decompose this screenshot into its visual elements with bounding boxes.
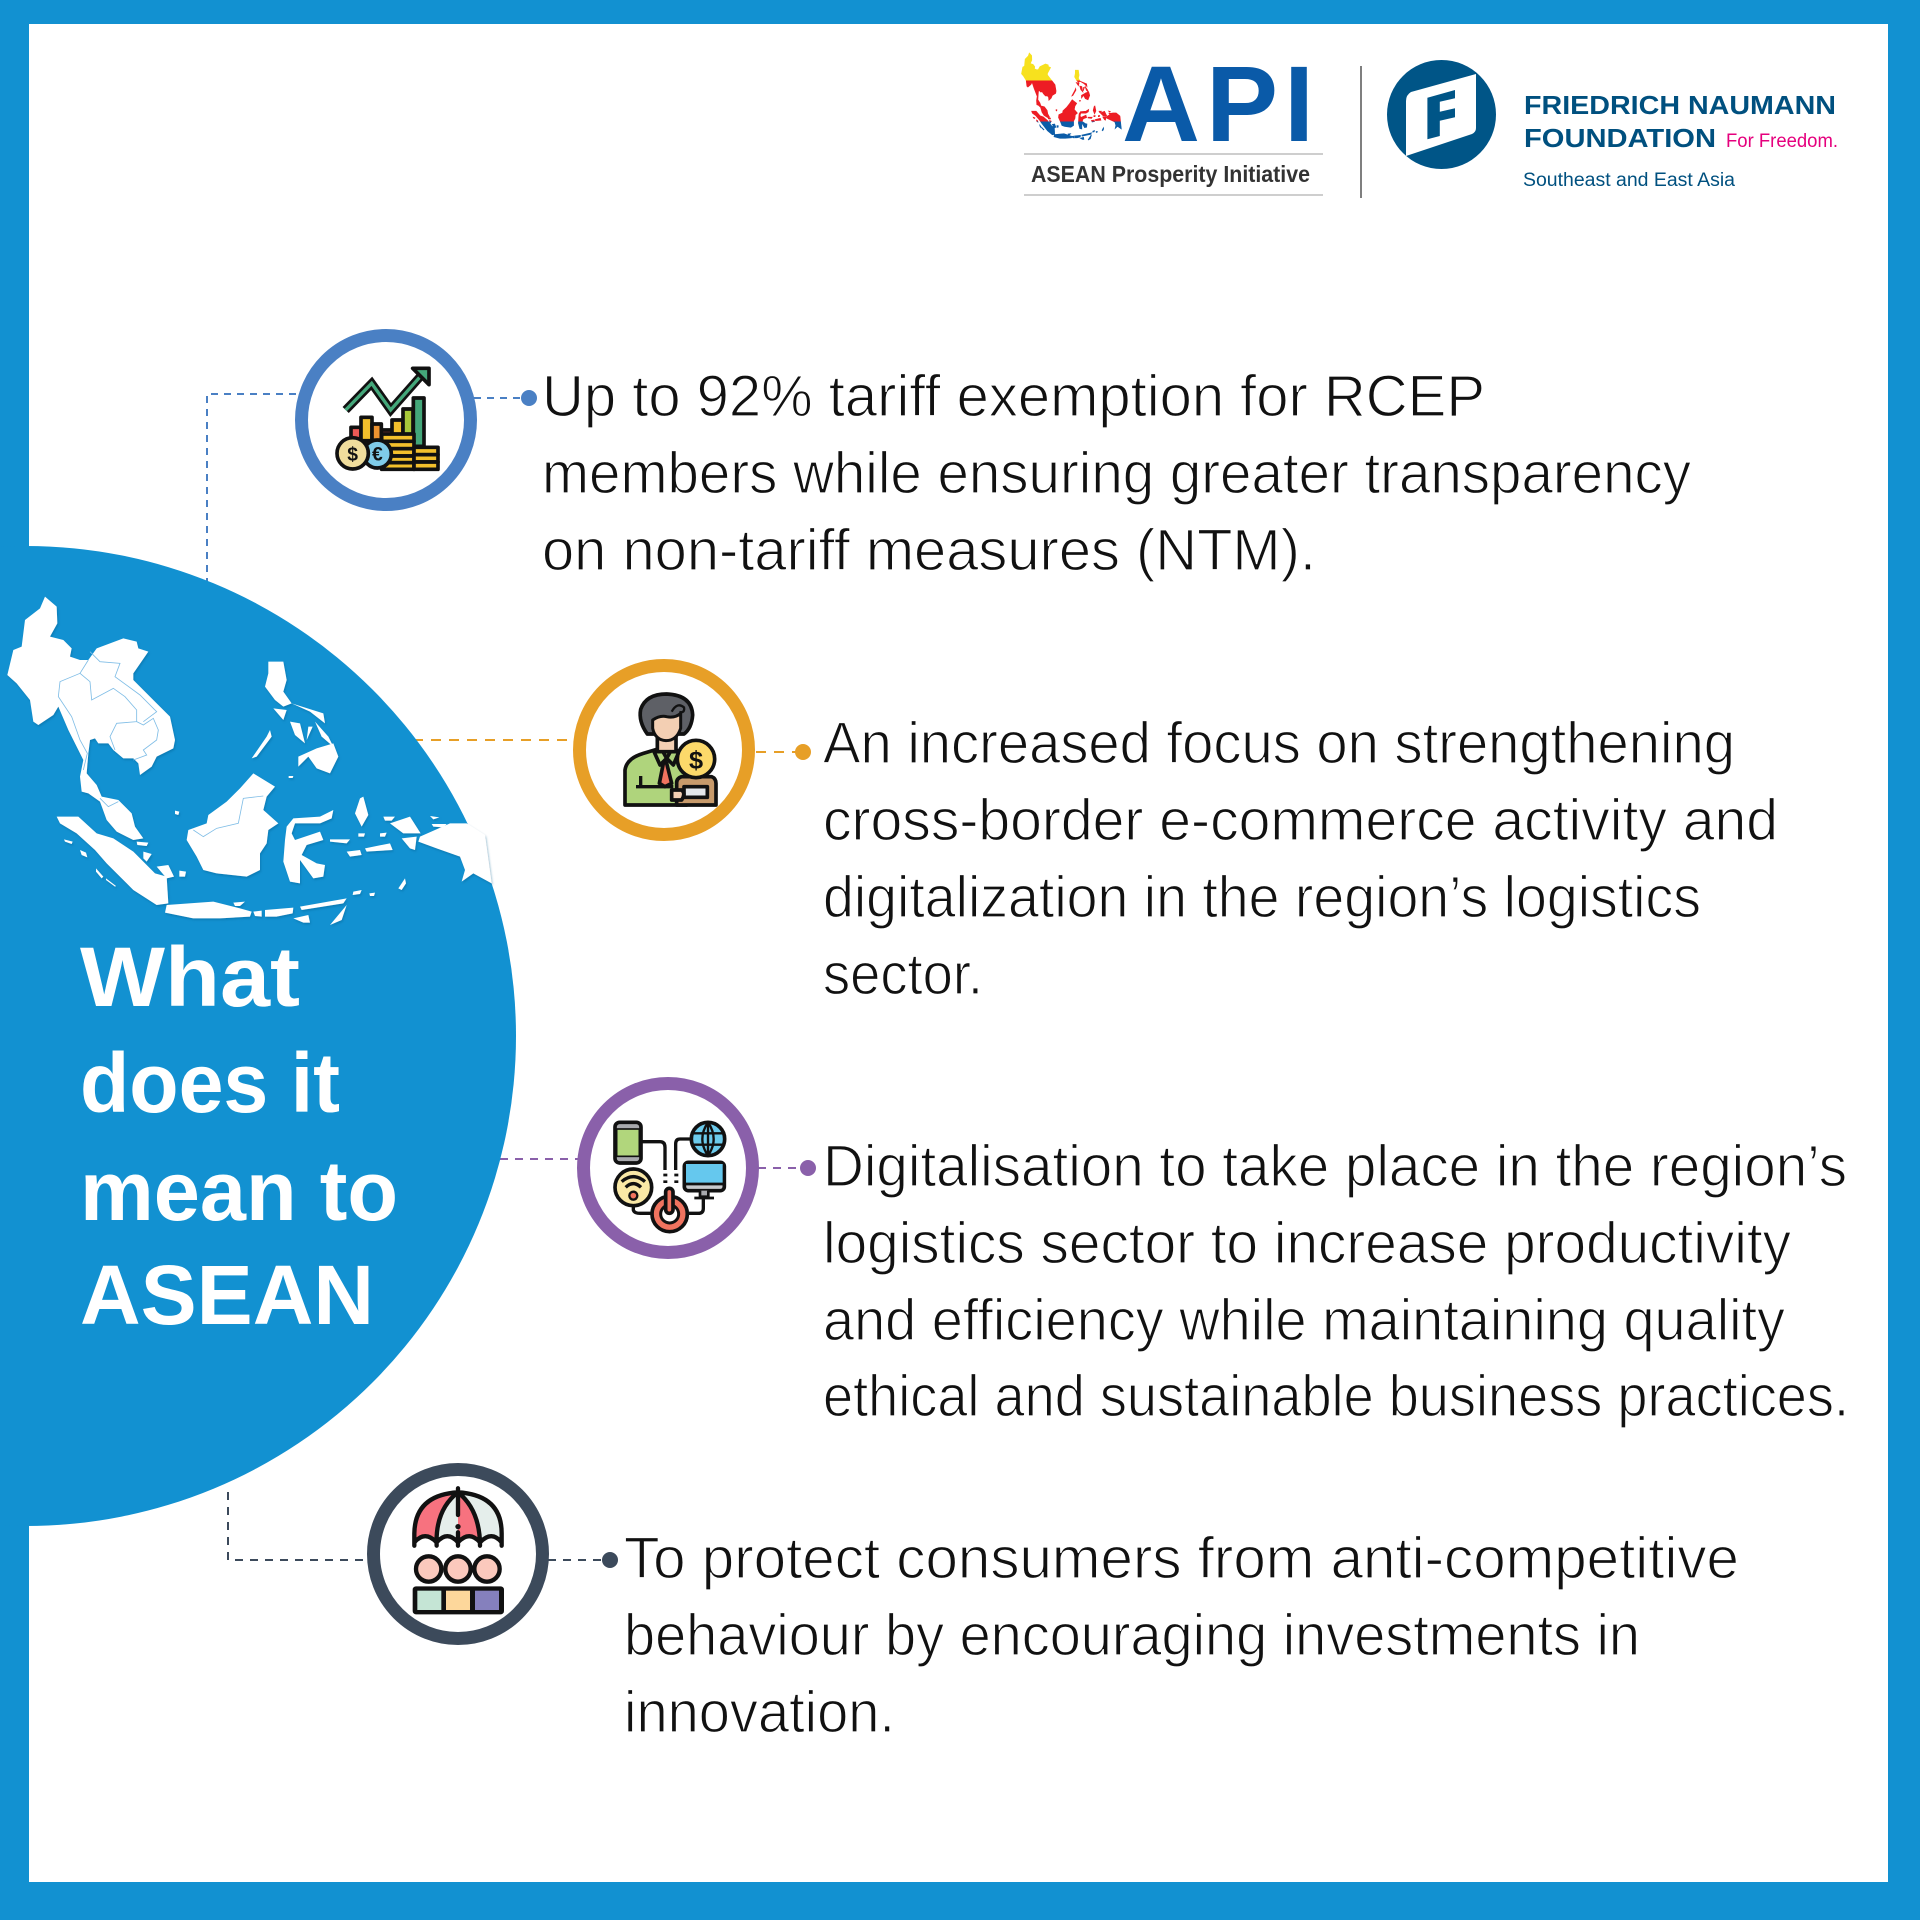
title: mean to	[80, 1144, 398, 1238]
logo: Friedrich Naumann Foundation	[1387, 60, 1838, 191]
connector: purple	[500, 1159, 803, 1168]
connector: orange	[413, 740, 797, 752]
logo divider	[1360, 66, 1362, 198]
text block 1: on non-tariff measures (NTM).	[542, 518, 1316, 583]
icon: finance chart in blue ring: $	[347, 444, 358, 465]
icon: finance chart in blue ring	[302, 336, 470, 504]
text block 3: Digitalisation to take place in the region’s	[823, 1134, 1847, 1199]
FNF emblem	[1387, 60, 1496, 169]
title: ASEAN	[80, 1248, 374, 1342]
bullet: orange	[795, 744, 811, 760]
bullet: dark	[602, 1552, 618, 1568]
icon: finance chart in blue ring: €	[372, 445, 383, 466]
text block 2: cross-border e-commerce activity and	[823, 788, 1778, 853]
API rule bottom	[1024, 194, 1323, 196]
text block 4: To protect consumers from anti-competitive	[624, 1526, 1739, 1591]
icon: digital network in purple ring	[584, 1084, 752, 1252]
text block 3: logistics sector to increase productivity	[823, 1211, 1791, 1276]
FNF region: Southeast and East Asia	[1523, 170, 1735, 191]
text block 2	[823, 711, 1778, 1007]
text block 4: innovation.	[624, 1680, 895, 1745]
text block 4: behaviour by encouraging investments in	[624, 1603, 1640, 1668]
API mini map	[1022, 53, 1121, 140]
API rule top	[1024, 153, 1323, 155]
API subtitle: ASEAN Prosperity Initiative	[1031, 161, 1310, 187]
title: does it	[80, 1036, 340, 1130]
icon: umbrella over consumers in dark ring	[374, 1470, 542, 1638]
map of Southeast Asia	[7, 597, 492, 925]
text block 2: digitalization in the region’s logistics	[823, 865, 1701, 930]
title: What	[80, 930, 300, 1024]
text block 3: and efficiency while maintaining quality	[823, 1288, 1785, 1353]
logo: API	[1022, 43, 1323, 195]
large blue circle	[0, 546, 516, 1526]
text block 4	[624, 1526, 1739, 1745]
text block 1: members while ensuring greater transparency	[542, 441, 1691, 506]
icon: businessman in orange ring	[580, 666, 748, 834]
text block 1	[542, 364, 1691, 583]
connector: dark	[228, 1492, 604, 1560]
FNF tagline: For Freedom.	[1726, 131, 1838, 152]
text block 1: Up to 92% tariff exemption for RCEP	[542, 364, 1485, 429]
API lettering: API	[1122, 43, 1314, 164]
connector: blue	[207, 394, 525, 585]
bullet: blue	[521, 390, 537, 406]
FNF wordmark line 1: FRIEDRICH NAUMANN	[1524, 90, 1836, 120]
text block 2: sector.	[823, 942, 983, 1007]
text block 2: An increased focus on strengthening	[823, 711, 1735, 776]
title	[80, 930, 398, 1342]
bullet: purple	[800, 1160, 816, 1176]
text block 3	[823, 1134, 1849, 1429]
text block 3: ethical and sustainable business practices.	[823, 1364, 1849, 1429]
icon: businessman in orange ring: $	[689, 747, 703, 775]
FNF wordmark line 2: FOUNDATION	[1524, 123, 1716, 153]
